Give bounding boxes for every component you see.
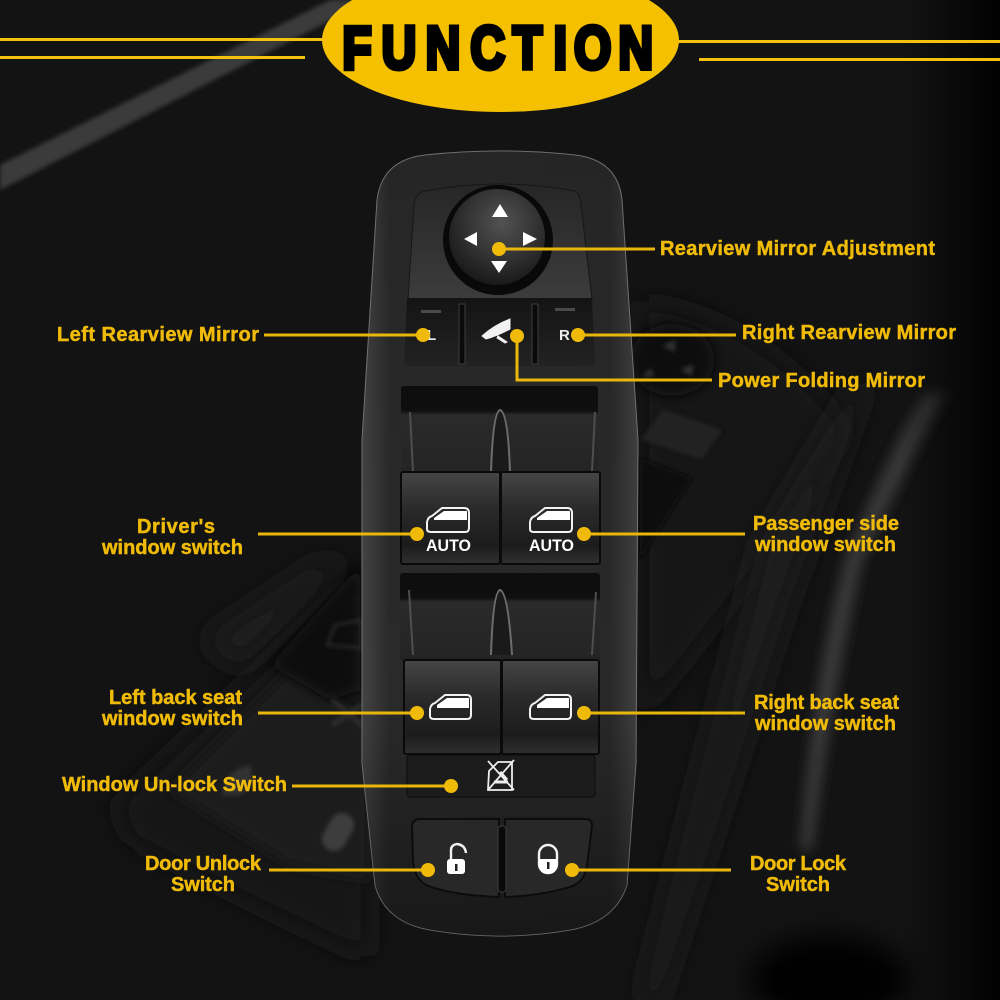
switch housing [362,151,638,936]
title badge [322,0,679,112]
title badge: FUNCTION [342,14,653,82]
icon: closed padlock [539,845,557,874]
label: Right back seat window switch [754,692,899,735]
label: Left back seat window switch: Left back seat [109,687,242,709]
label: Door Lock Switch: Switch [766,874,830,896]
label: Power Folding Mirror: Power Folding Mirror [718,370,925,392]
label: Right back seat window switch: Right back seat [754,692,899,714]
icon: window lock [488,760,514,790]
AUTO right: AUTO [529,536,574,555]
AUTO left: AUTO [426,536,471,555]
label: Right back seat window switch: window switch [754,713,896,735]
front window switches [401,386,600,564]
mirror buttons row [404,298,595,366]
label: Door Lock Switch: Door Lock [750,853,847,875]
icon: folding mirror [482,319,510,343]
label R: R [559,327,570,344]
label: Left back seat window switch [101,687,243,730]
label: Driver's window switch [101,516,243,559]
passenger window button [501,472,600,564]
icon: window [530,695,571,719]
label: Passenger side window switch: Passenger side [753,513,899,535]
callout dots [410,242,591,877]
left back button [404,660,501,754]
driver window button [401,472,500,564]
label: Left Rearview Mirror: Left Rearview Mirror [57,324,259,346]
header: FUNCTION [0,0,1000,112]
label: Door Unlock Switch: Door Unlock [145,853,262,875]
label: Rearview Mirror Adjustment: Rearview Mirror Adjustment [660,238,935,260]
window switch panel [362,151,638,936]
window lock bar [407,755,595,797]
label: Driver's window switch: window switch [101,537,243,559]
callout lines [258,249,745,870]
icon: open padlock [447,844,466,874]
label: Passenger side window switch: window switch [754,534,896,556]
label: Door Unlock Switch [145,853,262,896]
header rules [0,38,1000,61]
mirror adjustment knob [443,185,553,295]
label L: L [427,327,436,344]
rear window switches [400,573,600,754]
label: Passenger side window switch [753,513,899,556]
label: Left back seat window switch: window switch [101,708,243,730]
right back button [502,660,599,754]
label: Driver's window switch: Driver's [137,516,215,538]
label: Door Lock Switch [750,853,847,896]
door lock buttons [412,819,592,897]
icon: window [427,508,469,532]
icon: window [530,508,572,532]
label: Right Rearview Mirror: Right Rearview Mirror [742,322,956,344]
label: Window Un-lock Switch: Window Un-lock Switch [62,774,287,796]
label: Door Unlock Switch: Switch [171,874,235,896]
mirror control bezel [408,184,592,300]
icon: window [430,695,471,719]
